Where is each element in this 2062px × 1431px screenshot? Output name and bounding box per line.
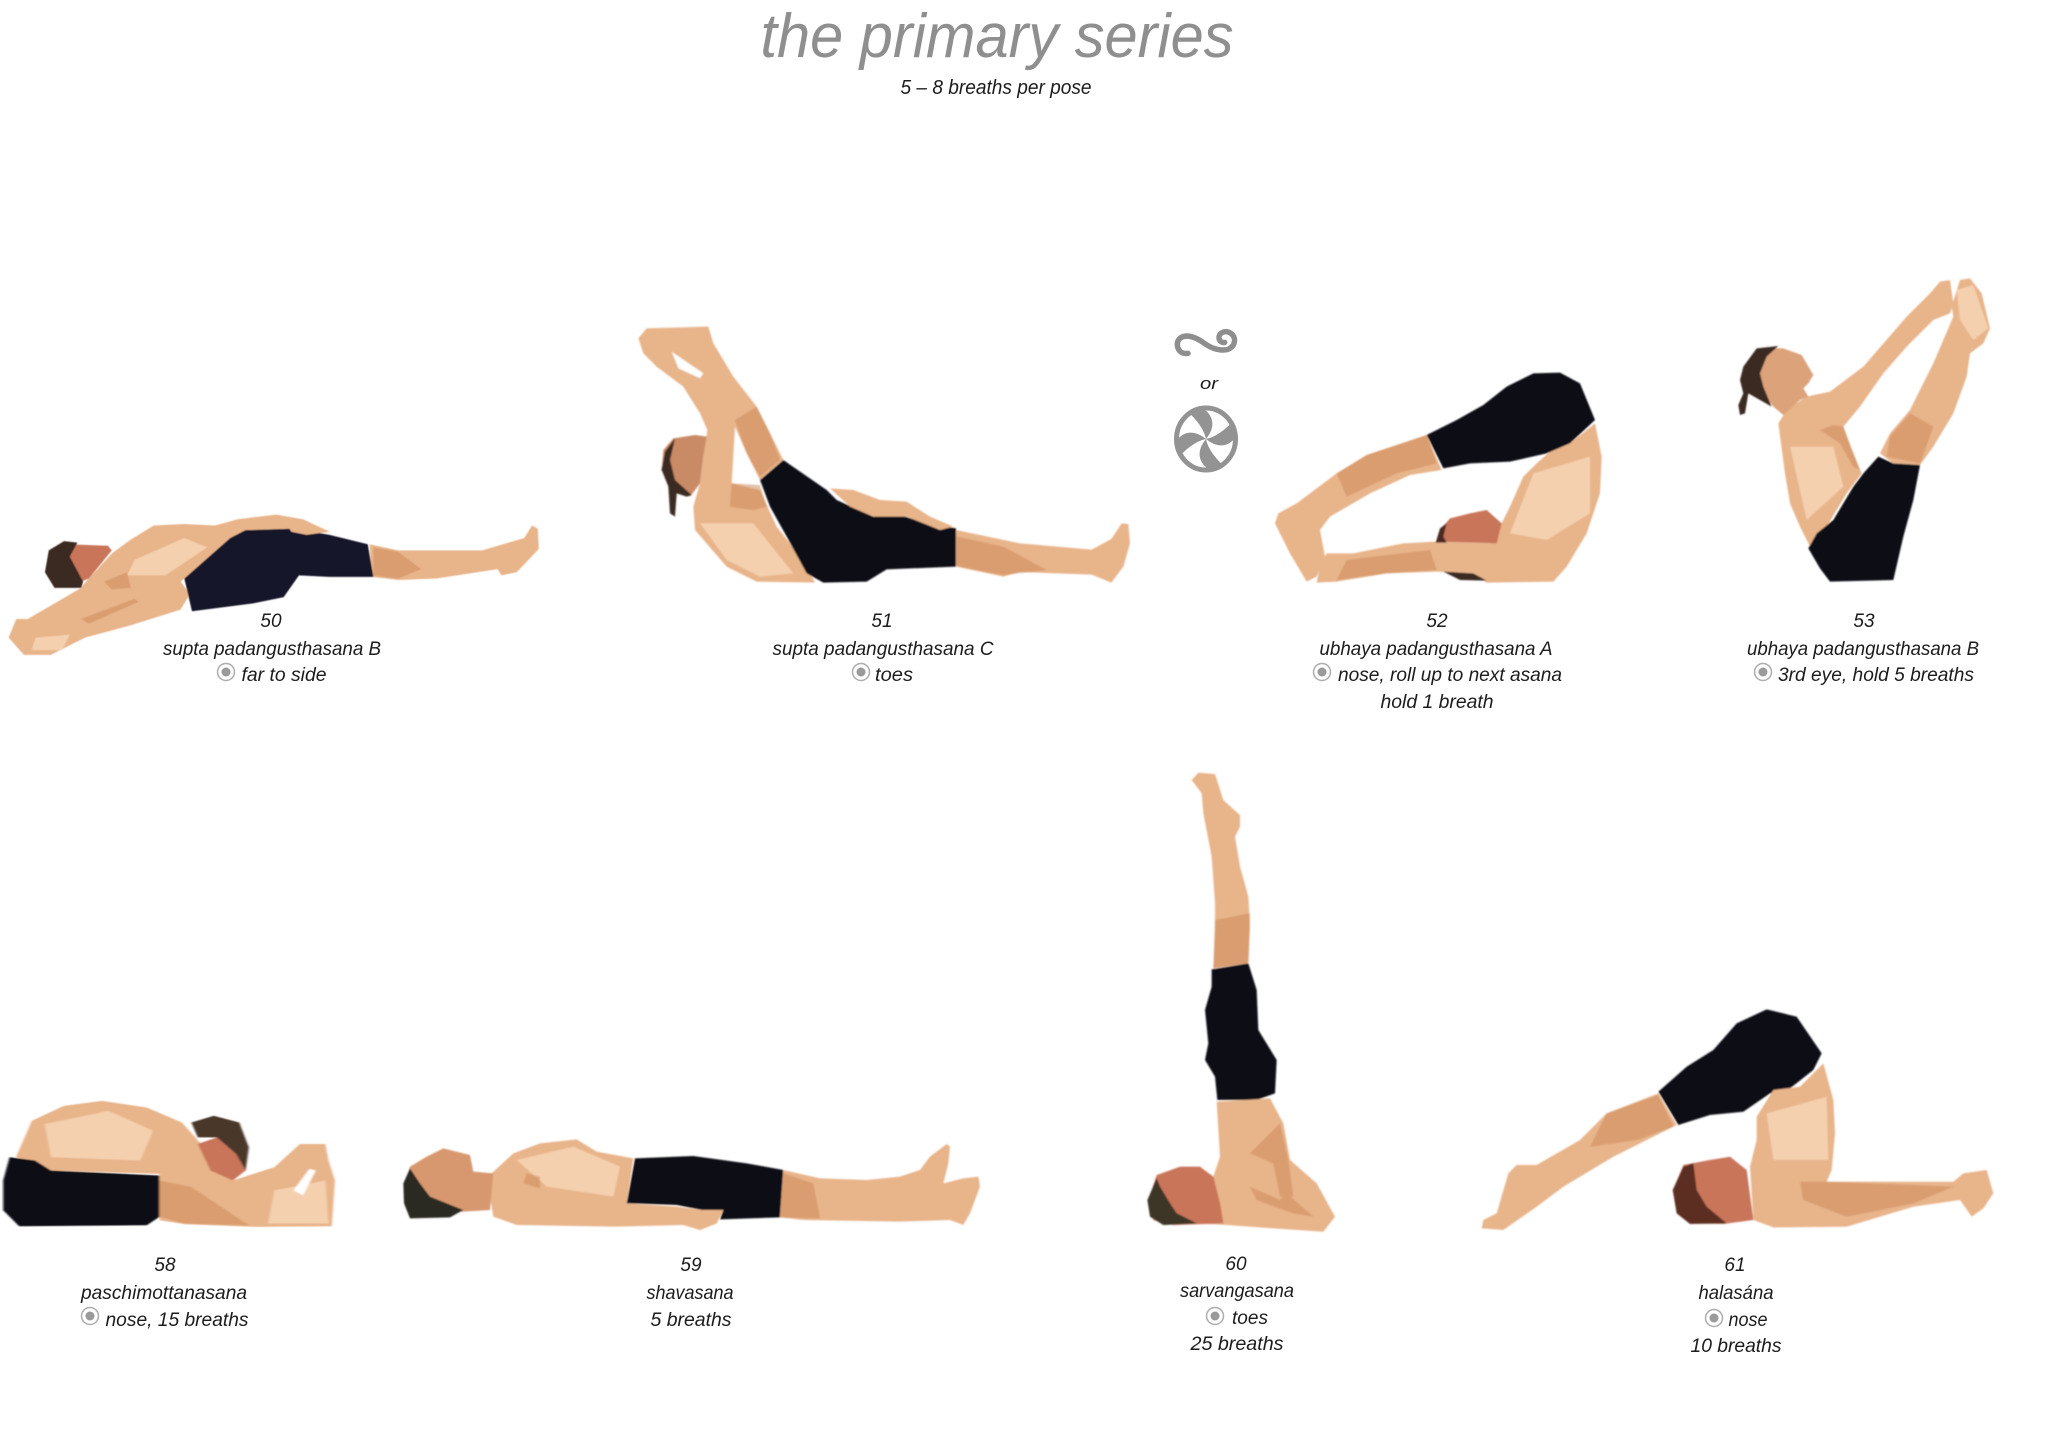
figure: shavasana (403, 1139, 980, 1230)
figure: ubhaya padangusthasana B (1738, 278, 1990, 582)
label: or: or (1200, 374, 1220, 393)
caption: pose 59: 5 breaths (650, 1310, 732, 1331)
caption: pose 51: toes (875, 665, 914, 686)
subtitle: 5 – 8 breaths per pose (900, 77, 1092, 99)
icon: spiral wheel (1175, 408, 1237, 470)
figure: supta padangusthasana B (9, 515, 539, 655)
caption: pose 59: 59 (680, 1255, 702, 1276)
icon: swirl ornament (1177, 332, 1235, 354)
figure: ubhaya padangusthasana A (1275, 373, 1602, 583)
caption: pose 61: halasána (1698, 1283, 1774, 1304)
caption: pose 58: paschimottanasana (80, 1283, 247, 1304)
panel: pose 53 (1738, 278, 1990, 686)
caption: pose 59 (646, 1255, 734, 1331)
caption: pose 52: 52 (1426, 611, 1448, 632)
caption: pose 58 (80, 1255, 249, 1331)
caption: pose 53: 53 (1853, 611, 1875, 632)
caption: pose 61: 61 (1724, 1255, 1746, 1276)
icon: gaze point (1754, 664, 1772, 680)
figure: sarvangasana (1147, 773, 1335, 1232)
caption: pose 60: sarvangasana (1180, 1281, 1294, 1302)
figure: paschimottanasana (3, 1101, 335, 1227)
caption: pose 60: 60 (1225, 1254, 1247, 1275)
title: the primary series (760, 2, 1234, 71)
caption: pose 53: ubhaya padangusthasana B (1747, 639, 1979, 660)
caption: pose 50: supta padangusthasana B (163, 639, 381, 660)
figure: halasana (1482, 1009, 1993, 1230)
caption: pose 60 (1180, 1254, 1294, 1355)
panel: pose 50 (9, 515, 539, 686)
icon: gaze point (1314, 664, 1330, 680)
icon: gaze point (852, 664, 870, 680)
caption: pose 52: nose, roll up to next asana (1338, 665, 1562, 686)
caption: pose 58: 58 (154, 1255, 176, 1276)
caption: pose 51: supta padangusthasana C (772, 639, 994, 660)
caption: pose 50: far to side (242, 665, 326, 686)
caption: pose 53 (1747, 611, 1979, 686)
symbols: breath or spiral (1175, 332, 1237, 470)
icon: gaze point (1206, 1308, 1224, 1324)
panel: pose 58 (3, 1101, 335, 1331)
caption: pose 61 (1690, 1255, 1782, 1357)
caption: pose 51 (772, 611, 994, 686)
caption: pose 58: nose, 15 breaths (106, 1310, 249, 1331)
caption: pose 52: hold 1 breath (1380, 692, 1494, 713)
panel: pose 51 (638, 327, 1130, 686)
caption: pose 59: shavasana (646, 1283, 734, 1304)
caption: pose 52 (1314, 611, 1562, 713)
icon: gaze point (218, 664, 234, 680)
panel: pose 60 (1147, 773, 1335, 1355)
caption: pose 53: 3rd eye, hold 5 breaths (1778, 665, 1974, 686)
caption: pose 60: 25 breaths (1189, 1334, 1284, 1355)
panel: pose 59 (403, 1139, 980, 1331)
caption: pose 61: nose (1728, 1310, 1768, 1331)
caption: pose 60: toes (1232, 1308, 1268, 1329)
panel: pose 61 (1482, 1009, 1993, 1357)
caption: pose 50 (163, 611, 381, 686)
icon: gaze point (1706, 1310, 1722, 1326)
panel: pose 52 (1275, 373, 1602, 713)
figure: supta padangusthasana C (638, 327, 1130, 583)
caption: pose 52: ubhaya padangusthasana A (1320, 639, 1552, 660)
caption: pose 61: 10 breaths (1690, 1336, 1782, 1357)
caption: pose 50: 50 (260, 611, 282, 632)
icon: gaze point (82, 1308, 98, 1324)
caption: pose 51: 51 (871, 611, 893, 632)
